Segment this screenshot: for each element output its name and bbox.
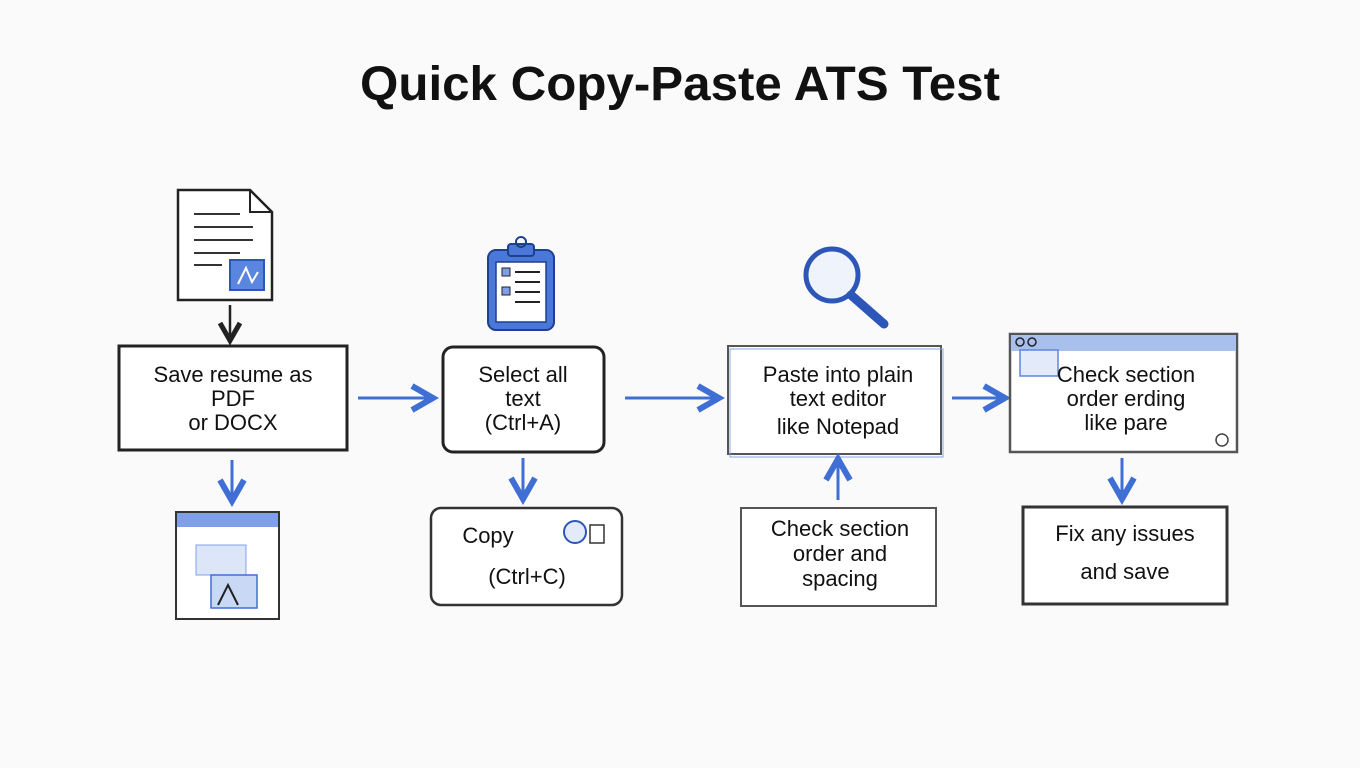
icon: document [178,190,272,300]
box: copy: (Ctrl+C) [488,564,566,589]
box: select all: text [505,386,541,411]
box: paste into editor [728,346,943,457]
box: save resume [119,346,347,450]
box: select all [443,347,604,452]
icon: window [176,512,279,619]
box: window check section: like pare [1084,410,1168,435]
arrow 3 [952,396,1002,400]
box: copy [431,508,622,605]
box: check section order and spacing [741,508,936,606]
box: fix any issues: Fix any issues [1055,521,1195,546]
arrow: doc to box1 [229,305,231,338]
title: Quick Copy-Paste ATS Test [360,58,1000,111]
box: check section order and spacing: order and [793,541,887,566]
box: save resume: Save resume as [154,362,312,387]
box: copy: Copy [462,523,514,548]
box: check section order and spacing: spacing [802,566,878,591]
arrow 2 [625,396,716,400]
arrow 1 [358,396,430,400]
box: paste into editor: like Notepad [777,414,899,439]
box: check section order and spacing: Check section [771,516,909,541]
icon: magnifier [806,249,884,324]
box: save resume: or DOCX [188,410,278,435]
box: select all: Select all [478,362,568,387]
box: paste into editor: text editor [790,386,886,411]
box: window check section: Check section [1057,362,1195,387]
box: save resume: PDF [211,386,255,411]
box: fix any issues: and save [1080,559,1170,584]
box: paste into editor: Paste into plain [763,362,913,387]
arrow: down 2 [522,458,524,496]
box: window check section: order erding [1067,386,1185,411]
arrow: down 4 [1120,458,1124,496]
box: fix any issues [1023,507,1227,604]
box: window check section [1010,334,1237,452]
arrow: up [836,462,840,500]
icon: clipboard [488,237,554,330]
arrow: down 1 [230,460,234,498]
box: select all: (Ctrl+A) [485,410,561,435]
